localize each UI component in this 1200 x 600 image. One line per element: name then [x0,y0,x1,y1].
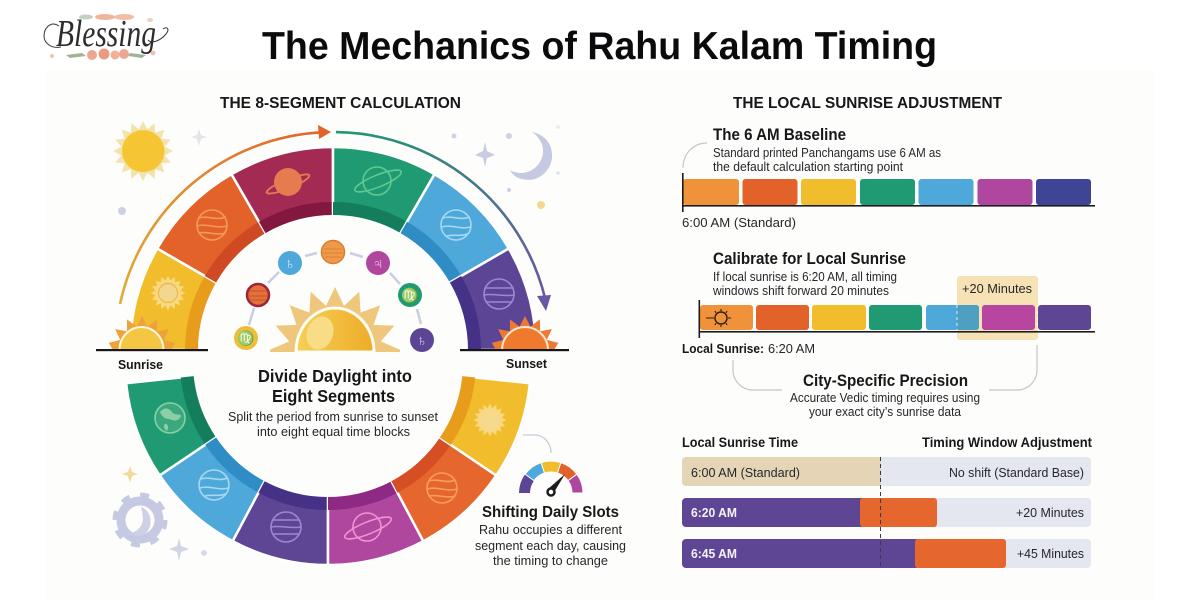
icon: sun top left [113,121,173,181]
text block: city-specific precision [790,372,980,419]
label: sunrise: Sunrise [118,358,163,372]
text block: shifting daily slots: Shifting Daily Slots [482,504,619,521]
highlight: plus 20 minutes: +20 Minutes [962,281,1032,296]
arrow: sunrise to zenith [120,125,331,304]
row: 6:00 AM [682,457,1091,486]
connector: baseline curve [683,143,707,168]
segment: green earth [126,376,216,476]
panel: the 8-segment calculation [96,95,626,568]
heading: 8-segment calculation: THE 8-SEGMENT CALCULATION [220,95,461,112]
icon: sunset sun and horizon [460,316,569,351]
text block: the 6 AM baseline: Standard printed Panchangams use 6 AM as [713,146,941,160]
row: 6:45 AM: +45 Minutes [1017,546,1084,561]
text block: calibrate for local sunrise [712,250,906,298]
text block: calibrate for local sunrise: windows shift forward 20 minutes [712,284,889,298]
panel: the local sunrise adjustment [682,95,1095,568]
segment: purple planet [450,248,536,350]
icon: crescent moon and stars [452,125,560,209]
segment: orange planet [157,174,266,282]
text block: shifting daily slots: segment each day, causing [475,538,626,553]
text block: the 6 AM baseline: the default calculation starting point [713,160,904,174]
chart: lower arc [126,376,530,565]
chart: 6 AM timeline [682,173,1095,212]
text block: the 6 AM baseline [713,126,941,174]
text block: city-specific precision: your exact city’s sunrise data [809,405,961,419]
text block: city-specific precision: Accurate Vedic timing requires using [790,391,980,405]
icon: orbit of small planets: ♄ [284,256,296,272]
table: timing adjustment [682,435,1092,568]
row: 6:20 AM [682,498,1091,527]
icon: decorative sparkles lower left [122,466,207,561]
label: local sunrise 6:20 AM [682,341,815,356]
row: 6:45 AM: 6:45 AM [691,546,737,561]
heading: local sunrise adjustment: THE LOCAL SUNRISE ADJUSTMENT [733,95,1002,112]
logo: Blessing: Blessing [56,13,156,55]
icon: orbit of small planets: ♍ [401,287,419,304]
label: local sunrise 6:20 AM: Local Sunrise: [682,341,764,356]
icon: gear and moon [115,495,165,545]
text block: calibrate for local sunrise: Calibrate for Local Sunrise [713,250,906,268]
segment: yellow sun [130,248,216,350]
connector: city-specific bracket [733,345,1037,390]
label: 6:00 AM standard: 6:00 AM (Standard) [682,215,796,230]
row: 6:00 AM: 6:00 AM (Standard) [691,465,800,480]
row: 6:20 AM: +20 Minutes [1016,505,1084,520]
connector: yellow segment to gauge [523,435,551,453]
icon: orbit of small planets: ♄ [416,332,428,350]
icon: gauge [519,461,583,496]
label: sunset: Sunset [506,357,548,371]
text block: city-specific precision: City-Specific Precision [803,372,968,390]
chart: upper daylight arc [130,147,536,350]
icon: small sunrise sun [706,309,731,327]
text block: calibrate for local sunrise: If local sunrise is 6:20 AM, all timing [713,270,897,284]
text block: divide daylight: Split the period from sunrise to sunset [228,409,438,424]
chart: local sunrise timeline [698,300,1095,338]
icon: central sun [270,287,400,353]
text block: shifting daily slots: the timing to change [493,553,608,568]
table headers: Timing Window Adjustment [922,435,1092,450]
icon: sunrise sun and horizon [96,316,208,351]
table headers: Local Sunrise Time [682,435,798,450]
segment: yellow sun [440,376,530,476]
icon: decorative stars left [118,129,207,215]
row: 6:45 AM [682,539,1091,568]
text block: shifting daily slots: Rahu occupies a different [479,522,622,537]
text block: divide daylight: Divide Daylight into [258,366,412,386]
text block: divide daylight [228,366,438,439]
icon: orbit of small planets: ♃ [372,256,384,272]
segment: purple planet [233,481,328,565]
segment: blue planet [160,438,265,541]
icon: orbit of small planets: ♍ [237,330,255,347]
title: The Mechanics of Rahu Kalam Timing [262,25,937,68]
segment: orange planet [391,438,496,541]
label: local sunrise 6:20 AM: 6:20 AM [768,341,815,356]
highlight: plus 20 minutes [957,276,1038,340]
segment: maroon ringed planet [232,147,333,233]
arrow: zenith to sunset [336,132,551,311]
row: 6:20 AM: 6:20 AM [691,505,737,520]
text block: the 6 AM baseline: The 6 AM Baseline [713,126,846,144]
segment: blue planet [400,174,509,282]
text block: divide daylight: into eight equal time blocks [257,424,410,439]
text block: shifting daily slots [475,504,626,568]
table headers [682,435,1092,450]
dashed marker: standard baseline [880,457,882,568]
segment: green ringed planet [333,147,434,233]
icon: orbit of small planets [234,240,434,352]
text block: divide daylight: Eight Segments [272,386,395,406]
row: 6:00 AM: No shift (Standard Base) [949,465,1084,480]
segment: magenta ringed planet [328,481,423,565]
